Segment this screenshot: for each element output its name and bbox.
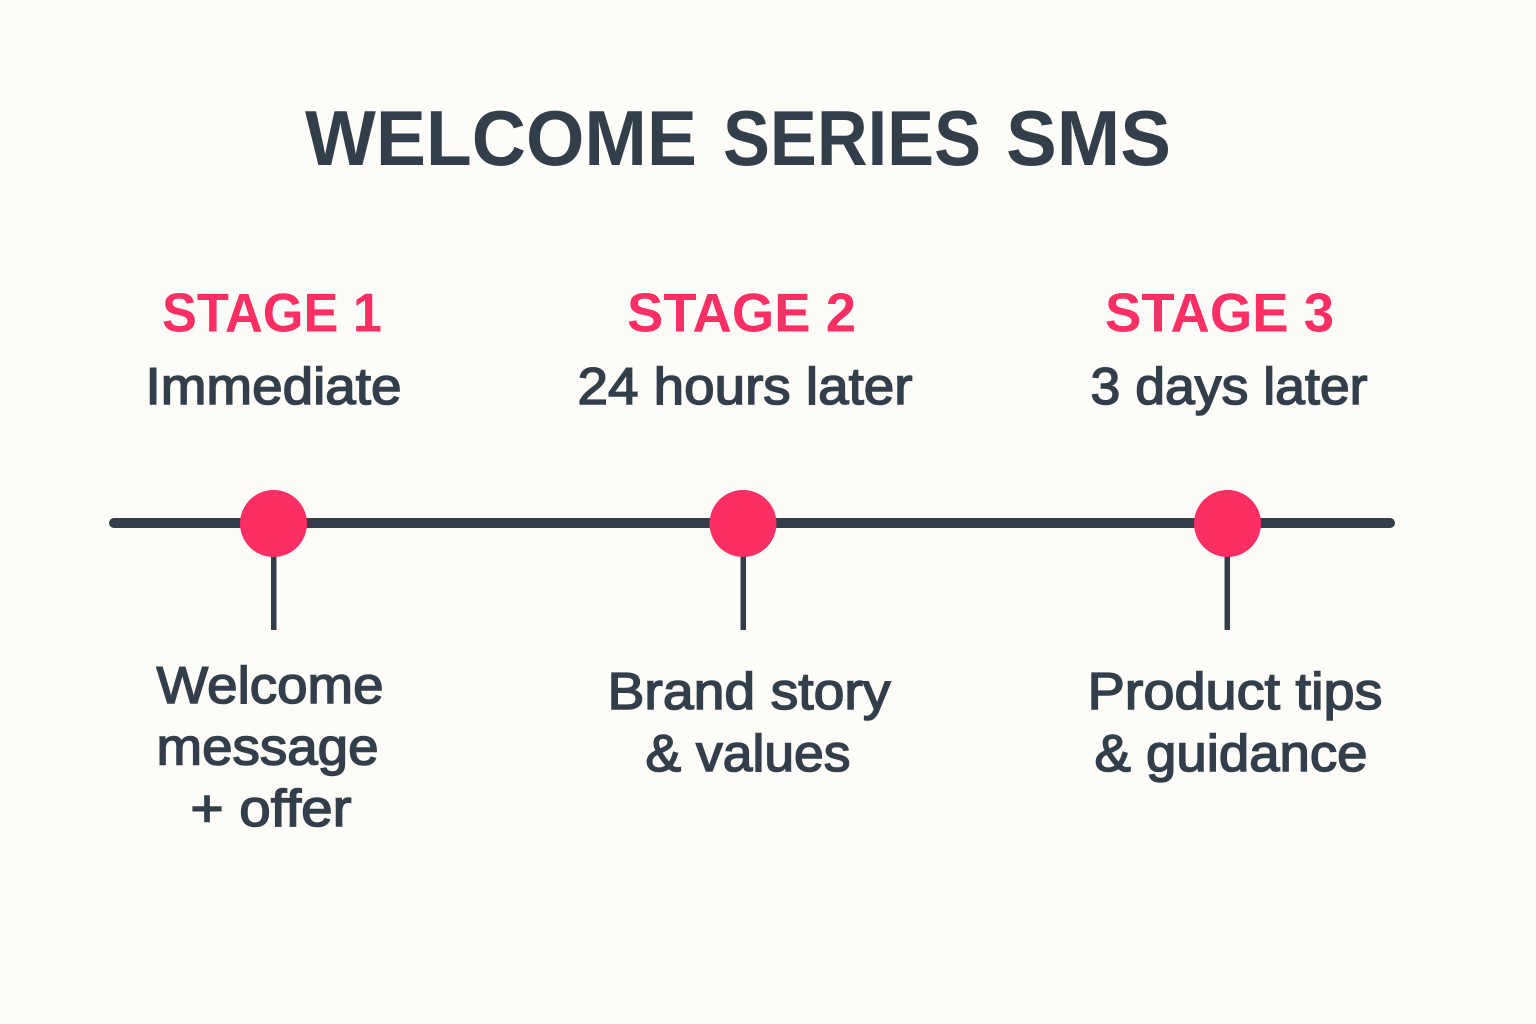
stage 3 timing: 3 days later [1090, 358, 1368, 416]
text block: stage 1 description: + offer [190, 780, 352, 838]
panel: stage 2 heading [578, 282, 912, 416]
stage 2 marker [710, 490, 776, 557]
title: SERIES [723, 94, 981, 182]
text block: stage 3 description: Product tips [1088, 663, 1382, 721]
stage 1 label: STAGE 1 [162, 282, 382, 344]
panel: stage 1 heading [146, 282, 402, 416]
text block: stage 2 description: Brand story [608, 663, 890, 721]
stage 2 label: STAGE 2 [627, 282, 856, 344]
title: WELCOME [305, 94, 697, 182]
timeline [114, 490, 1390, 630]
title: SMS [1006, 94, 1171, 182]
text block: stage 2 description [608, 663, 890, 783]
stage 3 label: STAGE 3 [1105, 282, 1334, 344]
timeline axis [114, 518, 1390, 528]
text block: stage 1 description [156, 657, 384, 838]
stage 2 connector [740, 550, 746, 630]
stage 1 marker [240, 490, 307, 557]
text block: stage 1 description: message [156, 718, 378, 776]
stage 3 marker [1194, 490, 1261, 557]
stage 3 connector [1224, 550, 1230, 630]
panel: stage 3 heading [1090, 282, 1368, 416]
title [305, 94, 1171, 182]
stage 2 timing: 24 hours later [578, 358, 912, 416]
text block: stage 3 description [1088, 663, 1382, 783]
text block: stage 2 description: & values [646, 725, 850, 783]
stage 1 connector [271, 550, 276, 630]
stage 1 timing: Immediate [146, 358, 402, 416]
text block: stage 3 description: & guidance [1094, 725, 1368, 783]
text block: stage 1 description: Welcome [156, 657, 384, 715]
